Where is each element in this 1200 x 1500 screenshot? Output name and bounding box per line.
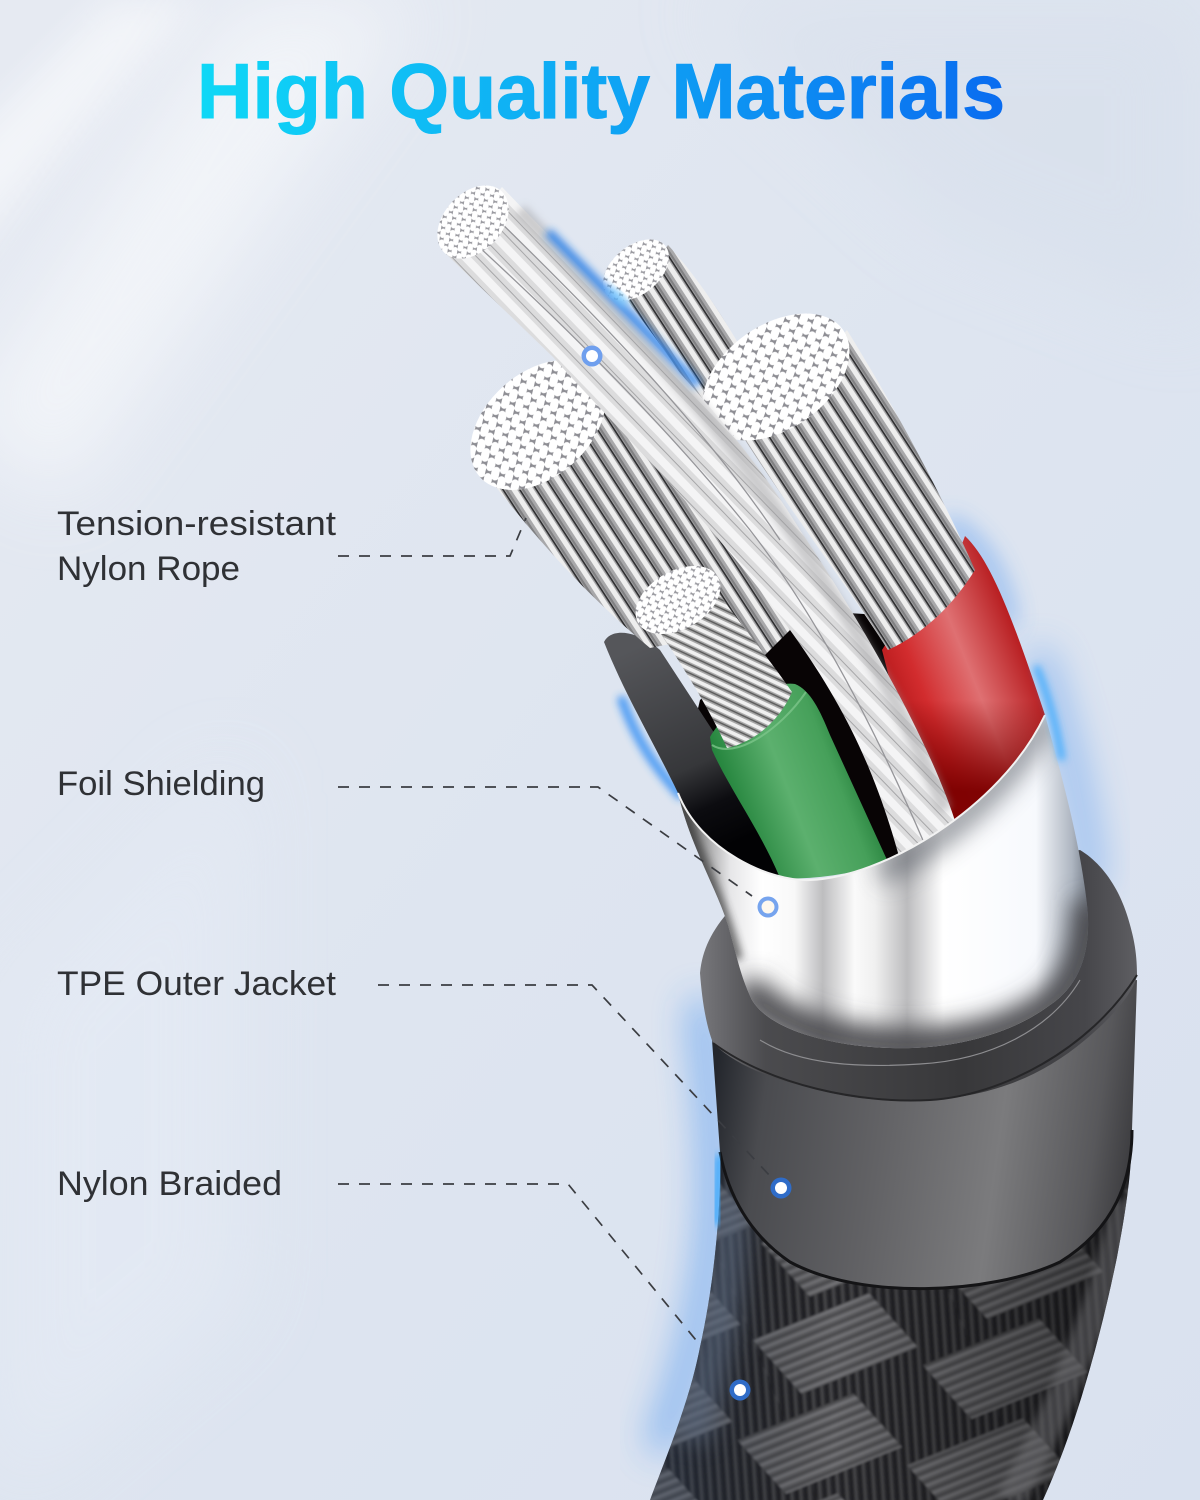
label: Foil Shielding: Foil Shielding xyxy=(57,765,265,803)
cable interior cavity xyxy=(678,610,1045,880)
large right strand xyxy=(679,287,975,650)
foil shielding xyxy=(678,715,1090,1048)
label: TPE Outer Jacket xyxy=(57,965,770,1176)
blue glow around cable xyxy=(622,525,1090,1440)
left edge blue highlight xyxy=(716,1155,719,1225)
right edge blue highlight xyxy=(1036,666,1062,760)
TPE outer jacket xyxy=(700,850,1137,1289)
label: Tension-resistant Nylon Rope: Tension-resistant xyxy=(57,505,337,543)
small rear copper strand xyxy=(591,227,770,420)
label: Tension-resistant Nylon Rope xyxy=(57,505,526,588)
white insulated wire xyxy=(423,172,957,860)
label: Foil Shielding xyxy=(57,765,752,896)
marker: braided sleeve xyxy=(730,1380,750,1400)
nylon rope strand xyxy=(445,334,790,680)
label: Nylon Braided: Nylon Braided xyxy=(57,1165,282,1203)
blue glow on white wire edge xyxy=(548,232,698,385)
red insulated wire xyxy=(882,536,1045,850)
label: Nylon Braided xyxy=(57,1165,700,1345)
marker: foil shielding xyxy=(758,896,778,918)
marker: nylon rope xyxy=(582,346,602,366)
title: High Quality Materials xyxy=(197,47,1005,135)
blue highlight xyxy=(605,285,631,309)
green insulated wire xyxy=(710,684,888,878)
nylon braided sleeve xyxy=(650,1160,1131,1500)
marker: TPE jacket xyxy=(770,1178,792,1198)
label: Tension-resistant Nylon Rope: Nylon Rope xyxy=(57,550,240,588)
label: TPE Outer Jacket: TPE Outer Jacket xyxy=(57,965,337,1003)
black insulated wire xyxy=(604,633,785,880)
small front strand xyxy=(624,552,792,748)
